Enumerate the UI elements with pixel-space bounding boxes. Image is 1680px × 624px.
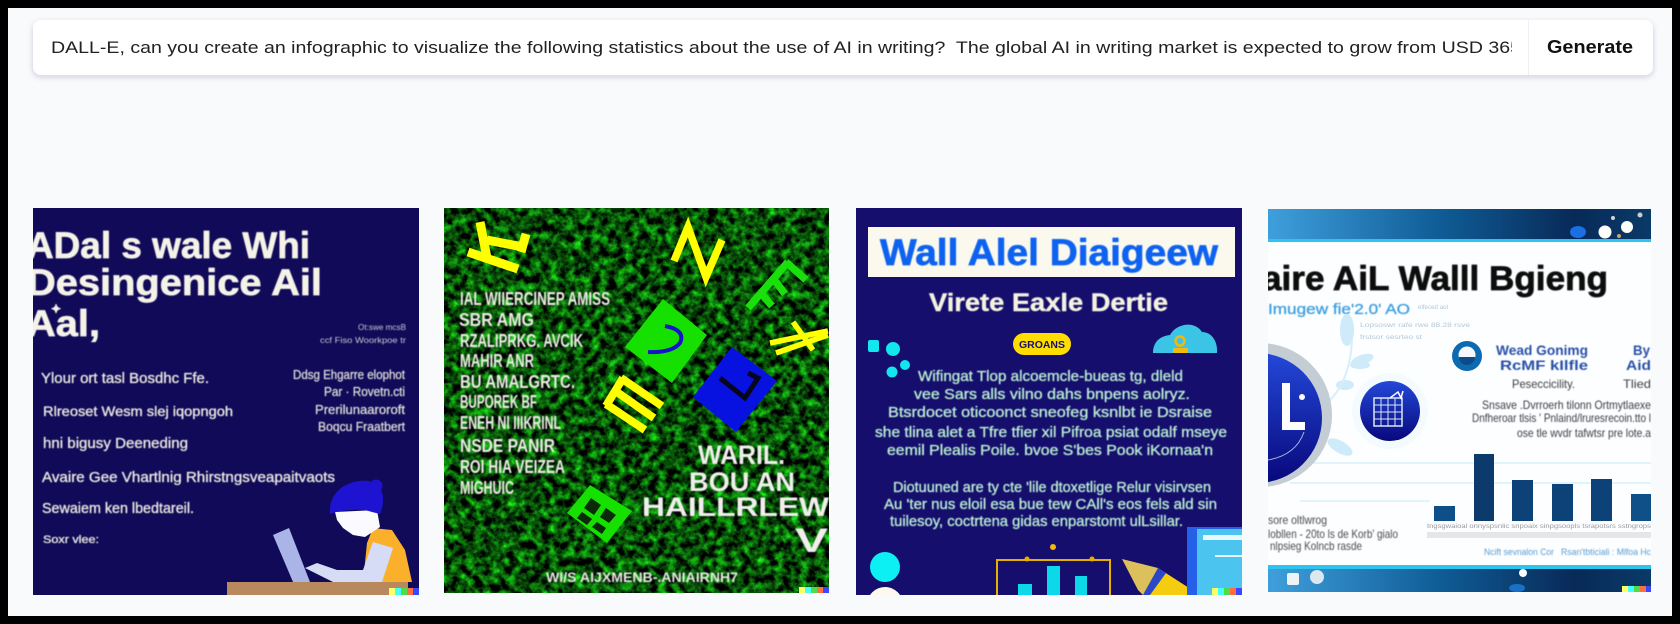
panel 1 left list: Soxr vlee: <box>43 534 99 546</box>
panel: blue diagram poster <box>856 208 1242 623</box>
bottom left text: sore oltlwrog <box>1268 513 1327 527</box>
panel 1 title: ✦ <box>51 302 61 316</box>
icon: person circles <box>870 552 900 595</box>
panel 4 colour signature <box>1622 586 1651 592</box>
icon: cloud <box>1153 325 1217 353</box>
panel 1 right list: Ddsg Ehgarre elophot <box>293 368 405 382</box>
panel 4 background <box>1268 209 1651 592</box>
panel 1 title: ADal s wale Whi <box>27 225 310 266</box>
left white text list: ENEH NI IIIKRINL <box>460 413 561 433</box>
left white text list: SBR AMG <box>459 310 534 330</box>
panel 1 left list: Sewaiem ken lbedtareil. <box>42 501 194 517</box>
panel 3 subtitle: Virete Eaxle Dertie <box>929 289 1168 317</box>
left white text list: RZALIPRKG. AVCIK <box>460 331 583 351</box>
panel 3 body text block two: Au 'ter nus eloil esa bue tew CAll's eos fels ald sin <box>884 496 1217 513</box>
panel 4 body text: ose tle wvdr tafwtsr pre lote.a <box>1517 426 1651 440</box>
bottom blue caption: Rsan'tbticiali : Mlfoa Hc <box>1561 547 1651 557</box>
calculator icon disc <box>1352 373 1428 449</box>
green diamond tile <box>625 299 707 383</box>
blue diamond tile <box>693 347 777 432</box>
column two heading: Aid <box>1626 357 1651 373</box>
faint small text <box>1360 305 1471 341</box>
icon: pencil <box>1122 559 1187 595</box>
panel 1 right list: Prerilunaaroroft <box>315 403 406 417</box>
panel 1 title <box>27 225 322 344</box>
panel 1 left list: Rlreoset Wesm slej iqopngoh <box>43 403 233 419</box>
panel 3 colour signature <box>1212 588 1242 595</box>
panel: white dashboard poster <box>1188 209 1651 592</box>
panel 1 right list: Par · Rovetn.cti <box>324 385 405 399</box>
yellow cross glyph <box>770 322 828 353</box>
panel 1 left list: hni bigusy Deeneding <box>43 435 188 452</box>
panel 1 title: Aal, <box>27 303 100 344</box>
green glyph top right <box>748 262 806 308</box>
panel 1 small right caption: Ot:swe mcsB <box>358 322 406 332</box>
black L on blue tile <box>720 373 758 398</box>
prompt bar <box>33 20 1653 75</box>
panel 3 body text block two <box>884 479 1217 530</box>
panel 3 body text block one <box>875 368 1227 459</box>
panel 1 small right caption: ccf Fiso Woorkpoe tr <box>320 335 406 345</box>
left white text list: MIGHUIC <box>460 478 514 498</box>
icon: blue document <box>1187 527 1242 595</box>
panel 4 body text: Tlied <box>1623 377 1651 391</box>
left white text list: ROI HIA VEIZEA <box>460 457 565 477</box>
left white text list: BUPOREK BF <box>460 392 537 412</box>
column one heading: RcMF kIlfle <box>1500 357 1588 373</box>
faint small text: Lopsoswr rafe rwe 88.28 rsve <box>1360 323 1471 329</box>
cyan dots decoration <box>868 340 910 378</box>
left white text list: BU AMALGRTC. <box>460 372 575 392</box>
panel: green leaf poster <box>444 208 830 593</box>
faint small text: elfeced aol <box>1418 305 1448 311</box>
panel 2 colour signature <box>799 587 829 593</box>
panel 1 colour signature <box>389 588 419 595</box>
bottom blue caption: Ncift sevnalon Cor <box>1484 547 1554 557</box>
panel 3 body text block two: Diotuuned are ty cte 'lile dtoxetlige Relur visirvsen <box>893 479 1211 496</box>
panel 1 background <box>33 208 419 595</box>
blue arc on green tile <box>648 326 681 352</box>
column one heading <box>1496 342 1588 373</box>
bottom left text <box>1268 513 1398 553</box>
panel 3 body text block one: Wifingat Tlop alcoemcle-bueas tg, dleld <box>918 368 1183 385</box>
panel 1 right list: Boqcu Fraatbert <box>318 420 406 434</box>
panel 2 leaf texture background <box>444 208 829 593</box>
right large white text: WARIL. <box>698 440 785 470</box>
circle badge icon <box>1452 341 1482 371</box>
panel 3 body text block two: tuilesoy, coctrtena gidas enparstomt ulLsillar. <box>890 513 1183 530</box>
left white text list: IAL WIIERCINEP AMISS <box>460 289 610 309</box>
prompt input box <box>33 20 1653 75</box>
column two heading <box>1626 342 1651 373</box>
yellow glyph top left <box>468 222 526 269</box>
bar chart <box>1427 454 1651 538</box>
panel 1 left list: Avaire Gee Vhartlnig Rhirstngsveapaitvaots <box>42 470 335 486</box>
panel 4 body text: Peseccicility. <box>1512 377 1575 391</box>
bottom left text: nlpsieg Kolncb rasde <box>1270 539 1362 553</box>
left white text list: NSDE PANIR <box>460 436 555 456</box>
top gradient band <box>1268 209 1651 242</box>
bottom left text: lobllen - 20to ls de Korb' gialo <box>1268 527 1398 541</box>
yellow letter N <box>674 227 722 277</box>
panel 1 small right caption <box>320 322 406 345</box>
column one heading: Wead Gonimg <box>1496 342 1588 358</box>
panel 4 blue subtitle: Imugew fie'2.0' AO <box>1268 301 1410 318</box>
right large white text: BOU AN <box>689 467 795 497</box>
yellow E glyph <box>606 378 662 430</box>
bar chart icon <box>996 544 1111 595</box>
generate button label: Generate <box>1547 37 1633 57</box>
right large white text <box>643 444 829 553</box>
icon: person typing at laptop <box>227 480 412 595</box>
panel 3 title banner: Wall Alel Diaigeew <box>880 232 1218 273</box>
generate button divider <box>1528 20 1529 75</box>
panel 1 left list <box>41 370 335 546</box>
prompt text: DALL-E, can you create an infographic to visualize the following statistics about the use of AI in writing? The global AI in writing market is expected to grow from USD 365 <box>51 38 1521 57</box>
bottom white caption: WI/S AIJXMENB-.ANIAIRNH7 <box>546 569 738 585</box>
column two heading: By <box>1633 342 1650 358</box>
large AI logo disc <box>1188 343 1332 487</box>
panel 1 title: Desingenice Ail <box>27 262 322 303</box>
chart grid lines <box>1290 463 1651 501</box>
green window tile <box>567 485 632 543</box>
panel 1 left list: Ylour ort tasl Bosdhc Ffe. <box>41 370 209 387</box>
panel 4 title: aire AiL Walll Bgieng <box>1262 260 1608 298</box>
bottom blue caption <box>1484 547 1651 557</box>
yellow pill badge <box>1013 333 1071 355</box>
panel 4 body text: Snsave .Dvrroerh tilonn Ortmytlaexe <box>1482 398 1651 412</box>
bottom gradient band <box>1268 565 1651 592</box>
right large white text: V <box>795 522 828 560</box>
leaf decoration <box>1325 314 1375 459</box>
faint small text: frstsor sesrteo st <box>1360 335 1422 341</box>
panel: navy writer poster <box>27 208 419 595</box>
panel 4 body text <box>1472 377 1651 440</box>
panel 3 body text block one: Btsrdocet oticoonct sneofeg ksnlbt ie Dsraise <box>888 404 1212 421</box>
right large white text: HAILLRLEW <box>642 492 830 522</box>
left white text list <box>459 289 610 498</box>
panel 3 body text block one: vee Sars alls vilno dahs bnpens aolryz. <box>914 386 1190 403</box>
yellow pill badge: GROANS <box>1019 340 1065 351</box>
panel 1 right list <box>293 368 406 434</box>
panel 3 background <box>856 208 1242 595</box>
left white text list: MAHIR ANR <box>460 351 534 371</box>
panel 3 body text block one: eemil Plealis Poile. bvoe S'bes Pook iKornaa'n <box>887 442 1213 459</box>
bar chart: tngsgwaioal onnyspsnlic snpoaix sinpgsoopls tsrapotsrs sstngrops <box>1427 524 1651 530</box>
panel 3 body text block one: she tlina alet a Tfre tfier xil Pifroa psiat odalf mseye <box>875 424 1227 441</box>
